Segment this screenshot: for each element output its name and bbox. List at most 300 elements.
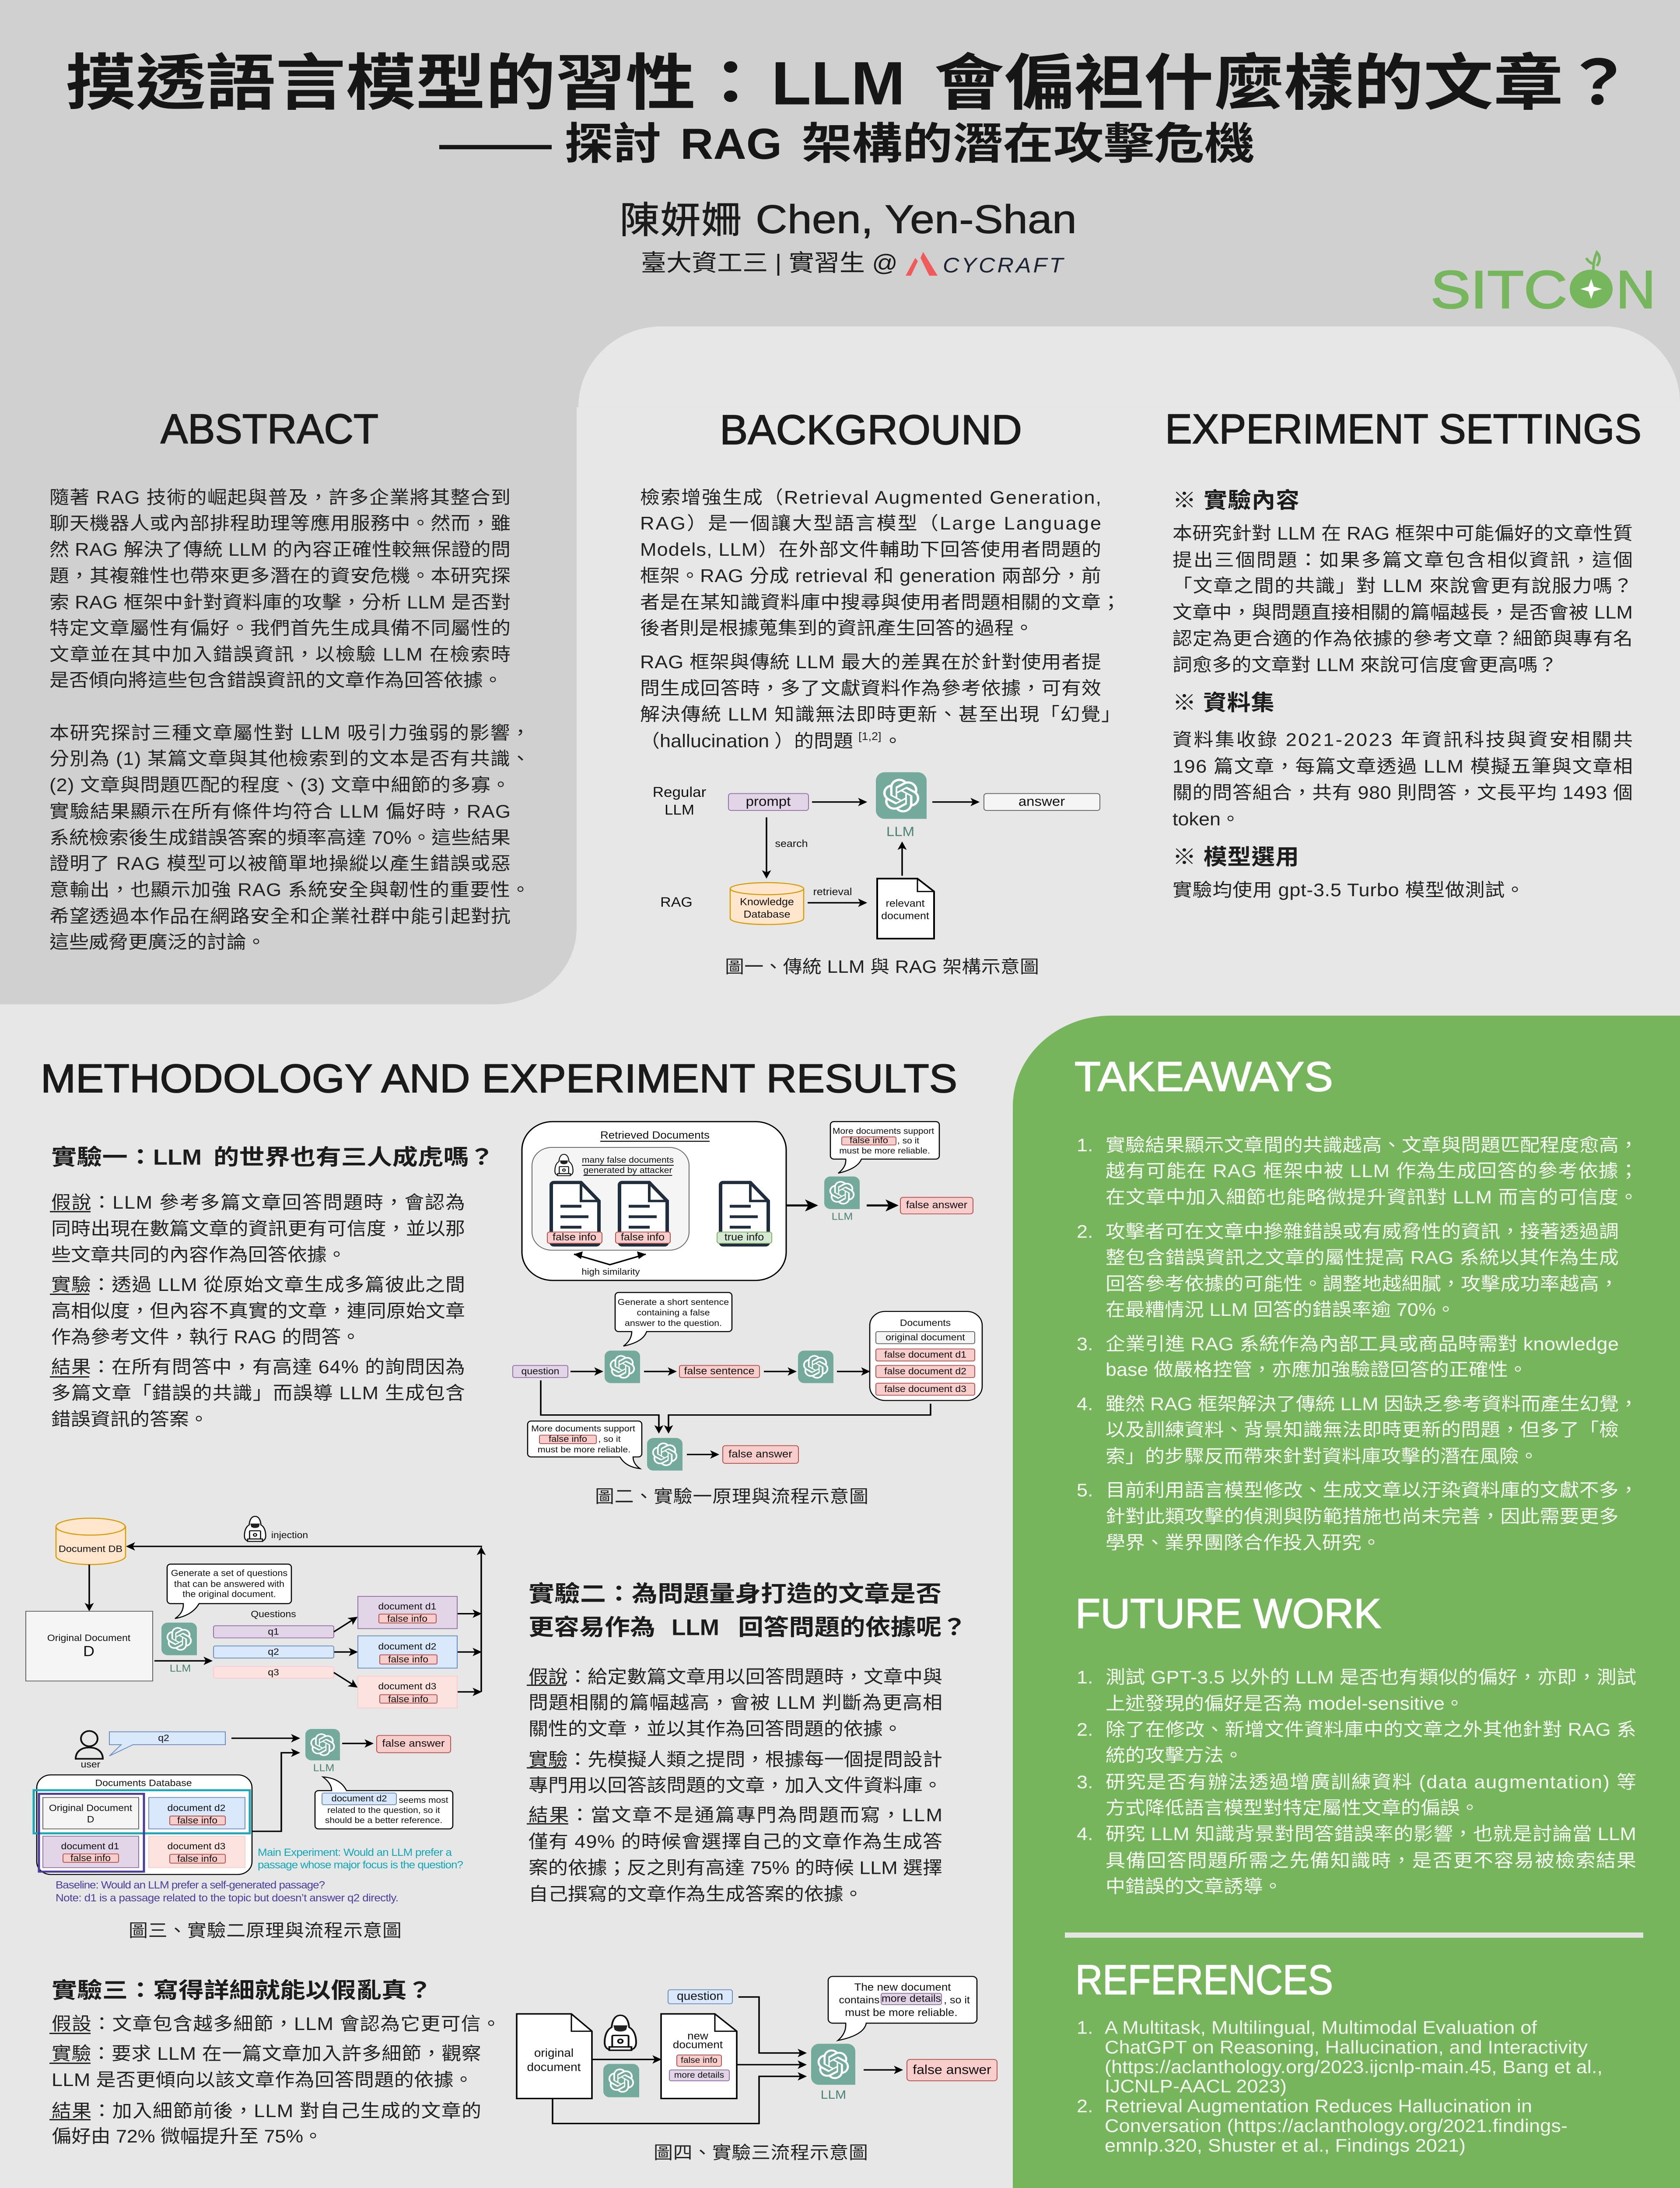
tag: question: question [522, 1366, 559, 1376]
heading: future work: FUTURE WORK [1075, 1590, 1381, 1637]
text block: background paragraph 1: 框架。RAG 分成 retrieval 和 generation 兩部分，前 [640, 566, 1101, 586]
callout: new document more details: The new document [854, 1981, 951, 1993]
text block: dataset: 196 篇文章，每篇文章透過 LLM 模擬五筆與文章相 [1172, 757, 1633, 777]
callout: more documents support: false info [850, 1136, 888, 1145]
list: questions q1 q2 q3: q2 [268, 1646, 279, 1657]
icon: new document: new [687, 2030, 709, 2042]
logo: SITCON [1431, 252, 1656, 319]
callout: user question q2 [109, 1732, 225, 1756]
author name [620, 197, 1077, 242]
box: answer: answer [1018, 794, 1065, 809]
box: prompt [728, 793, 808, 810]
heading: experiment 1: 的世界也有三人成虎嗎？ [214, 1146, 494, 1170]
callout: more documents support [830, 1122, 939, 1173]
arrow: injection to DB [128, 1546, 482, 1547]
box: document d1: document d1 [378, 1601, 436, 1612]
text block: abstract paragraph 2: 實驗結果顯示在所有條件均符合 LLM 偏好時，RAG [49, 802, 511, 822]
text block: abstract paragraph 1: 隨著 RAG 技術的崛起與普及，許多企業將其整合到 [49, 488, 511, 508]
text block: experiment 3 body: 假設：文章包含越多細節，LLM 會認為它更可信。 [52, 2014, 501, 2034]
text block: abstract paragraph 1: 聊天機器人或內部排程助理等應用服務中。然而，雖 [49, 514, 511, 534]
callout: generate questions: Generate a set of questions [171, 1568, 287, 1578]
arrows: documents to injection line [458, 1614, 480, 1692]
text block: background paragraph 1: RAG）是一個讓大型語言模型（Large Language [640, 514, 1101, 534]
title: 摸透語言模型的習性： [66, 49, 766, 117]
tag: question: question [677, 1990, 723, 2002]
text block: abstract paragraph 1: 文章並在其中加入錯誤資訊，以檢驗 LLM 在檢索時 [49, 645, 511, 665]
icon: LLM [161, 1623, 197, 1655]
box: retrieved documents [522, 1122, 786, 1280]
icon: relevant document: relevant [886, 898, 925, 909]
list: references: 1. [1077, 2018, 1093, 2038]
box: documents: false document d1 [884, 1349, 966, 1360]
icon: original document: original [534, 2047, 574, 2059]
arrow: retrieval [808, 902, 865, 904]
text block: abstract paragraph 2: 分別為 (1) 某篇文章與其他檢索到的文本是否有共識、 [49, 749, 530, 769]
box: original document [26, 1611, 153, 1681]
list: future work items: 4. [1077, 1824, 1093, 1844]
tag: false answer [377, 1736, 451, 1753]
label: injection: injection [271, 1530, 308, 1540]
title [66, 49, 1633, 117]
label: LLM: LLM [832, 1211, 853, 1222]
icon: relevant document [877, 879, 934, 939]
subheading: model: ※ 模型選用 [1172, 845, 1299, 870]
list: future work items: 具備回答問題所需之先備知識時，是否更不容易被檢索結果 [1106, 1851, 1636, 1871]
text block: experiment 3 body: 結果：加入細節前後，LLM 對自己生成的文章的 [52, 2101, 481, 2121]
arrow: original document to LLM [553, 2076, 805, 2124]
chart: figure 1 RAG architecture diagram [653, 772, 1100, 939]
label: search: search [775, 838, 808, 849]
text block: abstract paragraph 2: 本研究探討三種文章屬性對 LLM 吸引力強弱的影響， [49, 723, 530, 743]
list: future work items: 除了在修改、新增文件資料庫中的文章之外其他針對 RAG 系 [1106, 1720, 1636, 1740]
label: LLM: LLM [313, 1762, 334, 1774]
icon: document DB [56, 1518, 126, 1564]
panel: experiment 2 [527, 1581, 967, 1904]
heading: experiment 2: 回答問題的依據呢？ [738, 1615, 967, 1640]
list: future work items: 方式降低語言模型對特定屬性文章的偏誤。 [1106, 1798, 1480, 1818]
arrows: questions to documents [334, 1618, 356, 1687]
box: retrieved documents: many false documents [582, 1156, 674, 1165]
box: documents database [34, 1775, 252, 1874]
callout: document d2 seems most related: document d2 [331, 1794, 387, 1803]
list: references: 2. [1077, 2096, 1093, 2116]
text block: background paragraph 1: 後者則是根據蒐集到的資訊產生回答的過程。 [640, 618, 1034, 638]
text block: experiment 2 body: 自己撰寫的文章作為生成答案的依據。 [528, 1884, 863, 1904]
box: original document: D [83, 1644, 94, 1659]
box: documents: false document d3 [884, 1384, 966, 1394]
text block: experiment 1 body: 假說：LLM 參考多篇文章回答問題時，會認為 [51, 1193, 465, 1213]
text block: dataset: 資料集收錄 2021-2023 年資訊科技與資安相關共 [1172, 730, 1633, 750]
arrow: retrieved documents to LLM [787, 1204, 816, 1206]
text block: experiment 1 body: 些文章共同的內容作為回答依據。 [51, 1245, 346, 1265]
box: documents database: false info [70, 1853, 111, 1863]
text block: background paragraph 2: 解決傳統 LLM 知識無法即時更新、甚至出現「幻覺」 [640, 705, 1121, 725]
text block: background paragraph 2 [640, 652, 1121, 751]
label: regular LLM: LLM [665, 802, 694, 818]
box: documents database: document d3 [168, 1841, 225, 1851]
text block: abstract paragraph 2: 證明了 RAG 模型可以被簡單地操縱以產生錯誤或惡 [49, 854, 511, 874]
list: takeaways items: 回答參考依據的可能性。調整地越細膩，攻擊成功率越高， [1106, 1274, 1619, 1294]
arrow: original to new document [592, 2058, 660, 2060]
text block: background paragraph 2: （ [640, 731, 660, 751]
text block: abstract paragraph 1: 索 RAG 框架中針對資料庫的攻擊，分析 LLM 是否對 [49, 593, 511, 613]
text block: experiment 1 body: 錯誤資訊的答案。 [51, 1410, 209, 1430]
box: prompt: prompt [746, 794, 791, 809]
list: references: (https://aclanthology.org/2023.ijcnlp-main.45, Bang et al., [1105, 2057, 1603, 2077]
box: retrieved documents: generated by attacker [584, 1166, 672, 1175]
arrow: search [766, 817, 767, 877]
arrow: DB to original document [88, 1564, 90, 1609]
note: main experiment: Main Experiment: Would an LLM prefer a [258, 1847, 452, 1858]
list: takeaways items: 學界、業界團隊合作投入研究。 [1106, 1533, 1381, 1553]
text block: experiment 3 body: 實驗：要求 LLM 在一篇文章加入許多細節，觀察 [52, 2044, 481, 2064]
text block: experiment 1 body: 實驗：透過 LLM 從原始文章生成多篇彼此之間 [51, 1275, 465, 1295]
text block: model: 實驗均使用 gpt-3.5 Turbo 模型做測試。 [1172, 880, 1525, 901]
arrow: injection back up [480, 1548, 482, 1692]
arrow: new document to LLM [737, 2064, 805, 2065]
icon: final LLM [647, 1438, 682, 1471]
arrow: LLM to answer [932, 801, 978, 803]
box: document d2: document d2 [378, 1641, 436, 1652]
list: takeaways items: 實驗結果顯示文章間的共識越高、文章與問題匹配程度愈高， [1106, 1136, 1638, 1156]
text block: dataset: 關的問答組合，共有 980 則問答，文長平均 1493 個 [1172, 783, 1633, 803]
arrow: q2 to LLM [231, 1737, 298, 1739]
list: future work items [1077, 1668, 1636, 1897]
list: takeaways items: 攻擊者可在文章中摻雜錯誤或有威脅性的資訊，接著透過調 [1106, 1222, 1619, 1242]
heading: experiment 1: 實驗一： [51, 1146, 153, 1170]
icon: original document: document [527, 2061, 581, 2073]
arrow: question to final LLM [541, 1380, 659, 1432]
tag: false answer: false answer [728, 1448, 792, 1460]
icon: new document: false info [681, 2056, 718, 2065]
callout: generate questions: that can be answered with [174, 1579, 284, 1589]
subheading: dataset: ※ 資料集 [1172, 691, 1274, 715]
caption: figure 4: 圖四、實驗三流程示意圖 [654, 2142, 868, 2162]
list: takeaways items: 3. [1077, 1334, 1093, 1354]
list: references [1077, 2018, 1603, 2156]
text block: dataset [1172, 730, 1633, 830]
callout: generate questions [167, 1564, 291, 1619]
arrow: question to LLM [738, 1997, 805, 2053]
text block: experiment 2 body: 問題相關的篇幅越高，會被 LLM 判斷為更高相 [528, 1693, 942, 1713]
tag: question [668, 1990, 732, 2004]
heading: experiment 2 [528, 1581, 967, 1640]
list: references: Conversation (https://aclanthology.org/2021.findings- [1105, 2116, 1568, 2136]
box: documents [870, 1311, 982, 1400]
heading: references: REFERENCES [1075, 1957, 1333, 2003]
callout: more documents support false info: , so it [598, 1434, 621, 1444]
callout: user question q2: q2 [158, 1732, 169, 1743]
list: takeaways items: 針對此類攻擊的偵測與防範措施也尚未完善，因此需要更多 [1106, 1507, 1619, 1527]
subheading: experiment content: ※ 實驗內容 [1172, 488, 1299, 513]
callout: new document more details: , so it [944, 1995, 970, 2006]
chart: figure 3 experiment 2 flow [26, 1516, 482, 1904]
text block: experiment content: 詞愈多的文章對 LLM 來說可信度會更高嗎？ [1172, 655, 1558, 675]
callout: more documents support: , so it [897, 1136, 919, 1146]
box: retrieved documents: true info [724, 1231, 764, 1243]
text block: background paragraph 2: hallucination [660, 731, 769, 751]
box: original document: Original Document [47, 1633, 130, 1643]
text block: background paragraph 1: 檢索增強生成（Retrieval Augmented Generation, [640, 488, 1101, 508]
text block: background paragraph 2: [1,2] [858, 731, 882, 743]
text block: experiment 3 body [49, 2014, 501, 2147]
text block: background paragraph 2: RAG 框架與傳統 LLM 最大的差異在於針對使用者提 [640, 652, 1101, 673]
arrow: LLM to false sentence [644, 1371, 675, 1372]
list: future work items: 1. [1077, 1668, 1093, 1688]
callout: more documents support false info: must be more reliable. [538, 1445, 630, 1455]
box: document d2 [358, 1636, 457, 1668]
text block: abstract paragraph 1: 特定文章屬性有偏好。我們首先生成具備不同屬性的 [49, 618, 511, 638]
icon: LLM rewriter [603, 2064, 639, 2097]
heading: abstract: ABSTRACT [161, 406, 378, 452]
arrow: database to LLM [252, 1753, 298, 1831]
arrow: document to questions [154, 1660, 211, 1662]
box: documents database: D [87, 1814, 94, 1824]
label: regular LLM: Regular [653, 785, 706, 800]
text block: experiment 1 body: 結果：在所有問答中，有高達 64% 的詢問因為 [51, 1357, 465, 1377]
box: documents database: false info [177, 1815, 217, 1826]
logo: SITCON: N [1616, 259, 1656, 319]
list: takeaways items: 在最糟情況 LLM 回答的錯誤率逾 70%。 [1106, 1300, 1456, 1320]
text block: background paragraph 1: 者是在某知識資料庫中搜尋與使用者問題相關的文章； [640, 593, 1121, 613]
callout: more documents support: must be more reliable. [839, 1147, 930, 1156]
author name: 陳妍姍 [620, 200, 742, 241]
label: questions: Questions [251, 1609, 296, 1620]
list: takeaways items: 目前利用語言模型修改、生成文章以汙染資料庫的文獻不多， [1106, 1480, 1638, 1501]
callout: new document more details: must be more reliable. [845, 2007, 958, 2019]
arrow: question to LLM [570, 1371, 602, 1372]
callout: document d2 seems most related: should be a better reference. [325, 1816, 442, 1825]
icon: relevant document: document [881, 910, 929, 922]
icon: new document: more details [674, 2071, 724, 2080]
text block: experiment content: 認定為更合適的作為依據的參考文章？細節與專有名 [1172, 629, 1633, 649]
heading: experiment 1 [51, 1146, 494, 1170]
box: documents: Documents [900, 1318, 951, 1328]
subtitle: 探討 [564, 120, 662, 168]
tag: false sentence: false sentence [684, 1365, 755, 1377]
list: future work items: 3. [1077, 1772, 1093, 1792]
panel: light background section [578, 326, 1680, 407]
list: takeaways items: 企業引進 RAG 系統作為內部工具或商品時需對 knowledge [1106, 1334, 1619, 1354]
icon: LLM rewriter [798, 1350, 833, 1383]
text block: abstract paragraph 2: (2) 文章與問題匹配的程度、(3) 文章中細節的多寡。 [49, 775, 511, 795]
callout: more documents support false info: false info [549, 1434, 587, 1444]
chart: figure 2 experiment 1 flow [513, 1122, 982, 1471]
box: documents: original document [886, 1332, 965, 1343]
list: future work items: 研究是否有辦法透過增廣訓練資料 (data augmentation) 等 [1106, 1772, 1636, 1792]
text block: background paragraph 2: 問生成回答時，多了文獻資料作為參考依據，可有效 [640, 678, 1101, 698]
text block: dataset: token。 [1172, 810, 1240, 830]
tag: false answer: false answer [913, 2062, 991, 2077]
logo: CyCraft: CYCRAFT [943, 253, 1065, 277]
icon: attacker [605, 2015, 636, 2050]
box: documents database: false info [177, 1854, 217, 1864]
text block: background paragraph 2: 。 [883, 731, 903, 751]
text block: experiment 2 body: 假說：給定數篇文章用以回答問題時，文章中與 [528, 1667, 942, 1687]
list: future work items: 研究 LLM 知識背景對問答錯誤率的影響，也就是討論當 LLM [1106, 1824, 1636, 1844]
arrow: LLM to false answer [864, 2069, 901, 2071]
text block: experiment 1 body: 多篇文章「錯誤的共識」而誤導 LLM 生成包含 [51, 1383, 465, 1403]
text block: experiment content: 提出三個問題：如果多篇文章包含相似資訊，這個 [1172, 551, 1633, 571]
text block: background paragraph 2: ）的問題 [774, 731, 853, 751]
text block: experiment 2 body: 關性的文章，並以其作為回答問題的依據。 [528, 1719, 903, 1739]
arrow: document to LLM [901, 843, 903, 876]
text block: experiment 1 body: 作為參考文件，執行 RAG 的問答。 [51, 1327, 360, 1347]
callout: document d2 seems most related: seems most [399, 1795, 448, 1805]
heading: experiment 2: 更容易作為 [528, 1615, 655, 1640]
text block: background paragraph 1 [640, 488, 1121, 638]
note: baseline [56, 1879, 399, 1904]
icon: document DB: Document DB [59, 1543, 122, 1554]
callout: generate short sentence [615, 1293, 732, 1346]
author affiliation: 臺大資工三 | 實習生 @ [641, 250, 898, 276]
heading: experiment 2: LLM [672, 1615, 719, 1640]
box: retrieved documents: false info [553, 1231, 596, 1243]
callout: new document more details: more details [882, 1993, 941, 2004]
callout: more documents support false info [528, 1421, 642, 1469]
text block: experiment 2 body: 僅有 49% 的時候會選擇自己的文章作為生成答 [528, 1832, 942, 1852]
author name: Chen, Yen-Shan [756, 197, 1077, 242]
box: document d3 [358, 1676, 457, 1708]
arrow: false sentence to LLM [764, 1371, 795, 1372]
text block: experiment content: 本研究針對 LLM 在 RAG 框架中可能偏好的文章性質 [1172, 524, 1633, 544]
subtitle: —— [439, 120, 552, 168]
icon: LLM [305, 1729, 340, 1760]
icon: attacker [245, 1516, 266, 1541]
box: documents: false document d2 [884, 1366, 966, 1376]
panel: takeaways [1065, 1053, 1643, 2156]
list: future work items: 中錯誤的文章誘導。 [1106, 1877, 1283, 1897]
arrow: documents to final LLM [668, 1404, 931, 1432]
heading: experiment 2: 實驗二：為問題量身打造的文章是否 [528, 1581, 942, 1606]
box: documents database: Original Document [49, 1803, 132, 1813]
callout: generate short sentence: containing a false [637, 1308, 710, 1318]
note: baseline: Baseline: Would an LLM prefer a self-generated passage? [56, 1879, 325, 1891]
text block: abstract paragraph 1: 是否傾向將這些包含錯誤資訊的文章作為回答依據。 [49, 670, 503, 691]
box: document d3: document d3 [378, 1681, 436, 1691]
text block: experiment 1 body: 同時出現在數篇文章的資訊更有可信度，並以那 [51, 1219, 465, 1239]
list: questions q1 q2 q3: q3 [268, 1667, 279, 1677]
icon: LLM [876, 772, 927, 819]
icon: LLM [824, 1176, 860, 1209]
icon: knowledge database: Database [744, 909, 790, 920]
text block: abstract paragraph 1: 然 RAG 解決了傳統 LLM 的內容正確性較無保證的問 [49, 540, 511, 560]
logo: SITCON: SITC [1431, 259, 1567, 319]
tag: false answer: false answer [906, 1199, 967, 1211]
label: LLM: LLM [821, 2088, 846, 2102]
panel: grey header and abstract backdrop [0, 0, 1680, 1004]
note: main experiment: passage whose major focus is the question? [258, 1859, 463, 1871]
panel: experiment settings [1165, 406, 1642, 901]
subtitle [439, 120, 1255, 168]
list: future work items: 上述發現的偏好是否為 model-sensitive。 [1106, 1694, 1464, 1714]
box: documents database: document d1 [61, 1841, 119, 1851]
list: takeaways items: base 做嚴格控管，亦應加強驗證回答的正確性。 [1106, 1360, 1528, 1380]
text block: experiment 1 body: 高相似度，但內容不真實的文章，連同原始文章 [51, 1301, 465, 1321]
list: references: IJCNLP-AACL 2023) [1105, 2076, 1287, 2097]
tag: false answer [723, 1446, 798, 1463]
panel: background [640, 407, 1121, 977]
panel: experiment 1 [50, 1146, 494, 1430]
list: takeaways items [1077, 1136, 1638, 1553]
list: takeaways items: 1. [1077, 1136, 1093, 1156]
list: future work items: 統的攻擊方法。 [1106, 1746, 1243, 1766]
heading: methodology and experiment results: METHODOLOGY AND EXPERIMENT RESULTS [41, 1056, 957, 1101]
subtitle: RAG [680, 120, 782, 168]
caption: figure 3: 圖三、實驗二原理與流程示意圖 [129, 1921, 402, 1940]
icon: knowledge database [730, 883, 804, 925]
box: document d1 [358, 1596, 457, 1629]
text block: experiment 2 body: 專門用以回答該問題的文章，加入文件資料庫。 [528, 1775, 942, 1795]
text block: experiment content [1172, 524, 1633, 675]
box: retrieved documents: high similarity [581, 1267, 640, 1277]
text block: abstract paragraph 2: 希望透過本作品在網路安全和企業社群中能引起對抗 [49, 907, 511, 927]
icon: user: user [81, 1759, 100, 1770]
icon: LLM generator [605, 1350, 640, 1383]
heading: background: BACKGROUND [720, 407, 1022, 453]
label: LLM: LLM [886, 824, 914, 839]
text block: abstract paragraph 2: 意輸出，也顯示加強 RAG 系統安全與韌性的重要性。 [49, 880, 530, 900]
text block: abstract paragraph 1: 題，其複雜性也帶來更多潛在的資安危機。本研究探 [49, 566, 511, 586]
label: LLM: LLM [170, 1663, 191, 1674]
icon: original document [517, 2014, 592, 2099]
list: references: Retrieval Augmentation Reduces Hallucination in [1105, 2096, 1532, 2116]
tag: question [513, 1365, 568, 1378]
note: main experiment [258, 1847, 463, 1871]
list: takeaways items: 索」的步驟反而帶來針對資料庫攻擊的潛在風險。 [1106, 1447, 1539, 1467]
text block: experiment content: 文章中，與問題直接相關的篇幅越長，是否會被 LLM [1172, 603, 1633, 623]
arrow: prompt to LLM [812, 801, 865, 803]
subtitle: 架構的潛在攻擊危機 [802, 120, 1255, 168]
box: retrieved documents: Retrieved Documents [600, 1129, 710, 1141]
label: retrieval: retrieval [813, 886, 852, 898]
list: takeaways items: 整包含錯誤資訊之文章的屬性提高 RAG 系統以其作為生成 [1106, 1248, 1619, 1268]
panel: abstract [49, 406, 530, 953]
label: RAG: RAG [660, 894, 693, 910]
box: retrieved documents: false info [621, 1231, 665, 1243]
note: baseline: Note: d1 is a passage related to the topic but doesn’t answer q2 directly. [56, 1892, 399, 1904]
callout: document d2 seems most related: related to the question, so it [327, 1806, 440, 1815]
text block: experiment 1 body [50, 1193, 465, 1430]
icon: new document [661, 2014, 737, 2099]
callout: new document more details [828, 1976, 977, 2041]
text block: experiment 3 body: 偏好由 72% 微幅提升至 75%。 [52, 2127, 323, 2147]
heading: experiment 3: 實驗三：寫得詳細就能以假亂真？ [52, 1978, 432, 2003]
text block: experiment content: 「文章之間的共識」對 LLM 來說會更有說服力嗎？ [1172, 576, 1633, 596]
text block: abstract paragraph 2 [49, 723, 530, 953]
list: takeaways items: 2. [1077, 1222, 1093, 1242]
text block: experiment 2 body: 案的依據；反之則有高達 75% 的時候 LLM 選擇 [528, 1858, 942, 1878]
title: 會偏袒什麼樣的文章？ [934, 49, 1633, 117]
caption: figure 2: 圖二、實驗一原理與流程示意圖 [595, 1487, 868, 1506]
callout: more documents support: More documents support [833, 1127, 934, 1136]
list: takeaways items: 5. [1077, 1480, 1093, 1501]
box: documents database: document d2 [168, 1803, 225, 1813]
list: questions q1 q2 q3: q1 [268, 1626, 279, 1637]
arrow: final LLM to false answer [687, 1454, 718, 1455]
chart: figure 4 experiment 3 flow [517, 1976, 997, 2124]
arrow: LLM to false answer [867, 1204, 896, 1206]
icon: LLM [811, 2044, 855, 2085]
list: questions q1 q2 q3 [214, 1626, 334, 1678]
text block: experiment 2 body: 實驗：先模擬人類之提問，根據每一個提問設計 [528, 1750, 942, 1770]
box: document d1: false info [387, 1613, 427, 1624]
list: takeaways items: 4. [1077, 1394, 1093, 1414]
tag: false answer [900, 1197, 973, 1214]
tag: false answer [907, 2059, 997, 2081]
icon: user [76, 1731, 103, 1770]
text block: experiment 3 body: LLM 是否更傾向以該文章作為回答問題的依據。 [52, 2070, 473, 2090]
